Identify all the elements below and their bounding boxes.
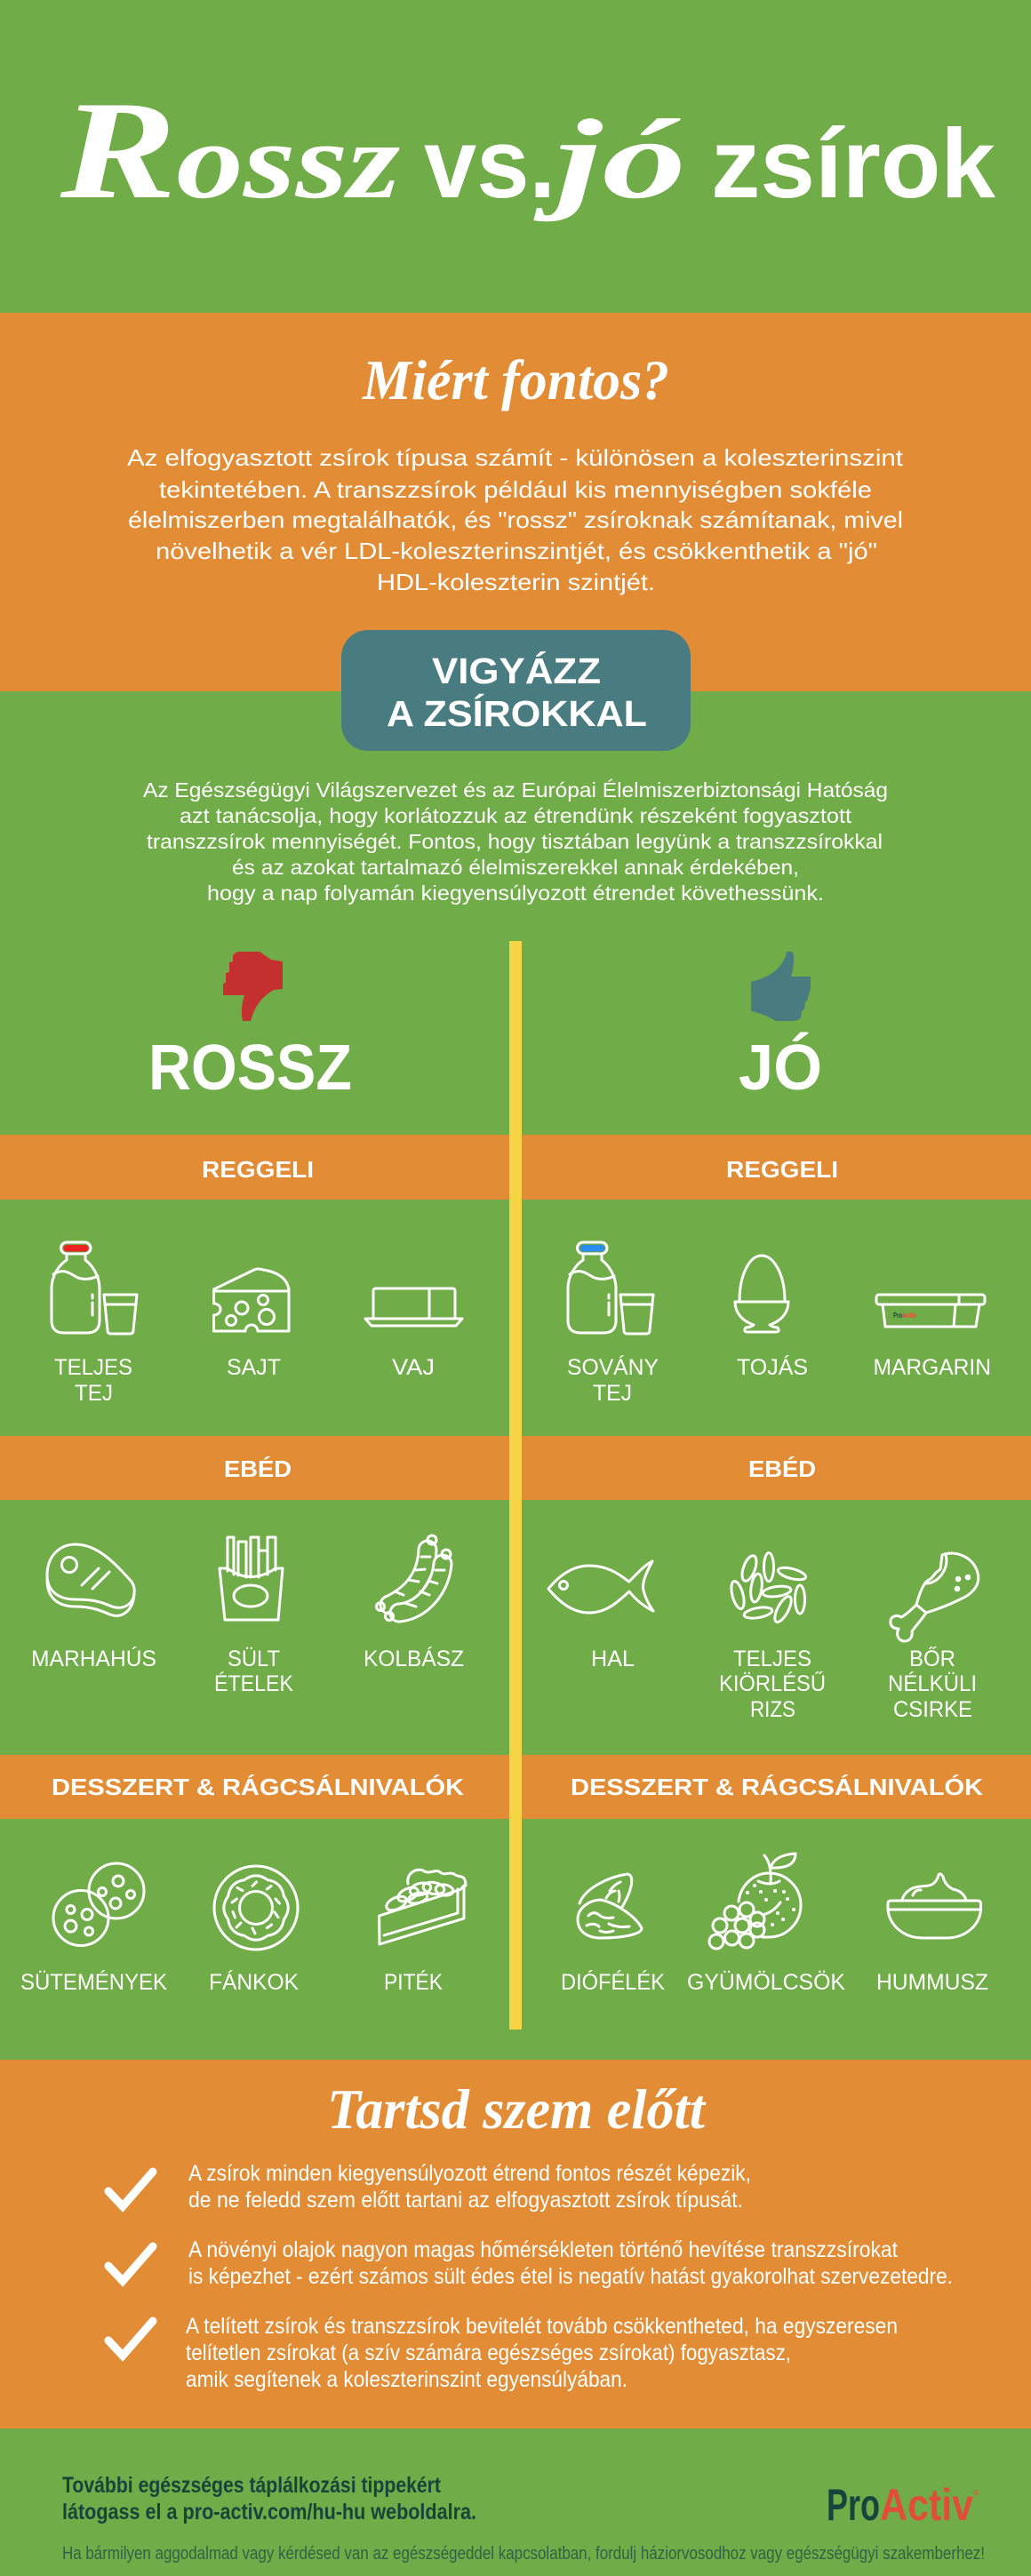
label [567, 1354, 659, 1406]
tip text: telítetlen zsírokat (a szív számára egészséges zsírokat) fogyasztasz, [186, 2341, 791, 2365]
panel: keep in mind background [0, 2060, 1031, 2428]
item: sausage [364, 1535, 464, 1671]
tip text: A telített zsírok és transzzsírok bevitelét tovább csökkentheted, ha egyszeresen [186, 2314, 898, 2339]
logo: ProActiv: ® [973, 2489, 979, 2497]
item: pies [380, 1870, 466, 1995]
icon: check mark [108, 2321, 153, 2356]
icon: check mark [108, 2246, 153, 2281]
item: hummus [876, 1874, 988, 1995]
item: skinless chicken [888, 1553, 979, 1722]
label: ÉTELEK [214, 1671, 293, 1696]
label: CSIRKE [893, 1697, 972, 1722]
heading: lunch left: EBÉD [224, 1455, 292, 1482]
item: fruits [687, 1854, 845, 1995]
callout: watch the fats: VIGYÁZZ [432, 650, 601, 691]
text block: recommendation [143, 778, 888, 905]
item: margarine [873, 1295, 991, 1380]
tip 1 [108, 2161, 751, 2213]
icon: fish [548, 1561, 653, 1613]
icon: chicken drumstick [891, 1553, 979, 1641]
heading: why it matters: Miért fontos? [362, 348, 669, 411]
label: HUMMUSZ [876, 1970, 988, 1995]
item: fried food [214, 1537, 293, 1696]
item: whole milk [52, 1242, 137, 1406]
icon: milk bottle with blue cap [568, 1242, 653, 1334]
tip text: A növényi olajok nagyon magas hőmérsékleten történő hevítése transzzsírokat [188, 2237, 898, 2262]
icon: bowl of hummus [888, 1874, 981, 1938]
label: TEJ [593, 1381, 632, 1406]
logo: ProActiv: Activ [880, 2480, 973, 2530]
heading: breakfast left: REGGELI [202, 1156, 314, 1183]
tip text: amik segítenek a koleszterinszint egyensúlyában. [186, 2367, 627, 2392]
label: SOVÁNY [567, 1354, 659, 1380]
label [888, 1646, 977, 1722]
text block: why it matters: élelmiszerben megtalálhatók, és "rossz" zsíroknak számítanak, mivel [128, 506, 903, 533]
icon: check mark [108, 2172, 153, 2206]
item: fish [548, 1561, 653, 1671]
label: HAL [591, 1647, 635, 1671]
tip 2 [108, 2237, 953, 2289]
icon: almonds [578, 1874, 642, 1938]
tip text [188, 2237, 953, 2289]
icon: rice grains [729, 1553, 807, 1624]
tip text: A zsírok minden kiegyensúlyozott étrend fontos részét képezik, [188, 2161, 751, 2186]
label: FÁNKOK [209, 1969, 299, 1995]
label: SÜLT [228, 1647, 280, 1671]
text block: recommendation: hogy a nap folyamán kiegyensúlyozott étrendet követhessünk. [207, 881, 824, 905]
item: egg [735, 1256, 808, 1380]
divider bar [509, 941, 522, 2030]
label: RIZS [750, 1697, 795, 1722]
text block: why it matters: Az elfogyasztott zsírok típusa számít - különösen a koleszterinszint [127, 444, 904, 471]
label: BŐR [909, 1646, 955, 1671]
heading: good: JÓ [739, 1032, 822, 1104]
icon: orange and grapes [709, 1854, 801, 1949]
item: cookies [20, 1863, 167, 1995]
panel: why it matters background [0, 313, 1031, 691]
footer link text: látogass el a pro-activ.com/hu-hu weboldalra. [62, 2500, 476, 2524]
tiny logo on margarine tub: Activ [902, 1312, 916, 1320]
tip text: de ne feledd szem előtt tartani az elfogyasztott zsírok típusát. [188, 2188, 743, 2213]
label [54, 1355, 132, 1406]
label: MARHAHÚS [31, 1646, 156, 1671]
label: TEJ [75, 1381, 113, 1406]
icon: fries [220, 1537, 283, 1620]
text block: recommendation: Az Egészségügyi Világszervezet és az Európai Élelmiszerbiztonsági Hatóság [143, 778, 888, 802]
heading: dessert and snacks right: DESSZERT & RÁGCSÁLNIVALÓK [571, 1774, 983, 1800]
text block: recommendation: transzzsírok mennyiségét. Fontos, hogy tisztában legyünk a transzzsírokkal [147, 830, 883, 853]
tip text [188, 2161, 751, 2213]
heading: breakfast right: REGGELI [726, 1156, 838, 1183]
tiny logo on margarine tub [893, 1312, 916, 1320]
logo: ProActiv [827, 2480, 979, 2530]
text block: why it matters [127, 444, 904, 595]
item: cheese [213, 1269, 289, 1380]
title [60, 73, 996, 228]
label: KIÖRLÉSŰ [719, 1671, 826, 1696]
text block: why it matters: növelhetik a vér LDL-koleszterinszintjét, és csökkenthetik a "jó" [156, 538, 877, 564]
icon: egg in cup [735, 1256, 788, 1332]
tip 3 [108, 2314, 898, 2392]
label: TOJÁS [737, 1354, 808, 1380]
callout: watch the fats [341, 630, 691, 751]
label: VAJ [392, 1355, 435, 1380]
icon: milk bottle with red cap [52, 1242, 137, 1334]
icon: steak [47, 1544, 134, 1615]
band: lunch [0, 1436, 1031, 1500]
text block: why it matters: HDL-koleszterin szintjét. [377, 569, 655, 595]
label: TELJES [54, 1355, 132, 1380]
tip text [186, 2314, 898, 2392]
label: DIÓFÉLÉK [561, 1969, 665, 1995]
item: skimmed milk [567, 1242, 659, 1406]
icon: sausages [377, 1535, 451, 1621]
title: Rossz [60, 73, 400, 228]
label: MARGARIN [873, 1355, 991, 1380]
label: SÜTEMÉNYEK [20, 1969, 167, 1995]
title: jó [533, 96, 686, 222]
label: TELJES [733, 1647, 811, 1671]
label: SAJT [227, 1355, 281, 1380]
label: PITÉK [384, 1969, 443, 1995]
band: breakfast [0, 1135, 1031, 1200]
band: dessert and snacks [0, 1755, 1031, 1819]
icon: thumbs down [223, 952, 283, 1021]
heading: keep in mind: Tartsd szem előtt [327, 2078, 707, 2141]
icon: margarine tub [876, 1295, 985, 1327]
title: zsírok [711, 109, 996, 219]
label [214, 1647, 293, 1696]
footer link text [62, 2473, 476, 2524]
tiny logo on margarine tub: Pro [893, 1312, 902, 1320]
icon: donut [214, 1866, 298, 1950]
label: NÉLKÜLI [888, 1671, 977, 1696]
icon: cheese [213, 1269, 289, 1331]
logo: ProActiv: Pro [827, 2480, 880, 2530]
icon: thumbs up [751, 952, 811, 1021]
item: nuts [561, 1874, 665, 1995]
item: butter [365, 1288, 462, 1380]
label [719, 1647, 826, 1722]
heading: bad: ROSSZ [148, 1033, 352, 1104]
text block: recommendation: és az azokat tartalmazó élelmiszerekkel annak érdekében, [232, 856, 799, 879]
icon: butter on dish [365, 1288, 462, 1326]
text block: recommendation: azt tanácsolja, hogy korlátozzuk az étrendünk részeként fogyasztott [180, 804, 852, 827]
tip text: is képezhet - ezért számos sült édes étel is negatív hatást gyakorolhat szervezetedre. [188, 2264, 953, 2289]
heading: dessert and snacks left: DESSZERT & RÁGCSÁLNIVALÓK [52, 1774, 464, 1800]
text block: why it matters: tekintetében. A transzzsírok például kis mennyiségben sokféle [159, 476, 872, 503]
icon: cookies [53, 1863, 144, 1946]
footer link text: További egészséges táplálkozási tippekért [62, 2473, 442, 2498]
title: vs. [424, 109, 555, 219]
heading: lunch right: EBÉD [748, 1455, 816, 1482]
label: GYÜMÖLCSÖK [687, 1970, 845, 1995]
item: wholegrain rice [719, 1553, 826, 1722]
icon: pie slice [380, 1870, 466, 1944]
item: beef [31, 1544, 156, 1671]
item: donuts [209, 1866, 299, 1995]
label: KOLBÁSZ [364, 1646, 464, 1671]
callout: watch the fats: A ZSÍROKKAL [387, 693, 647, 734]
